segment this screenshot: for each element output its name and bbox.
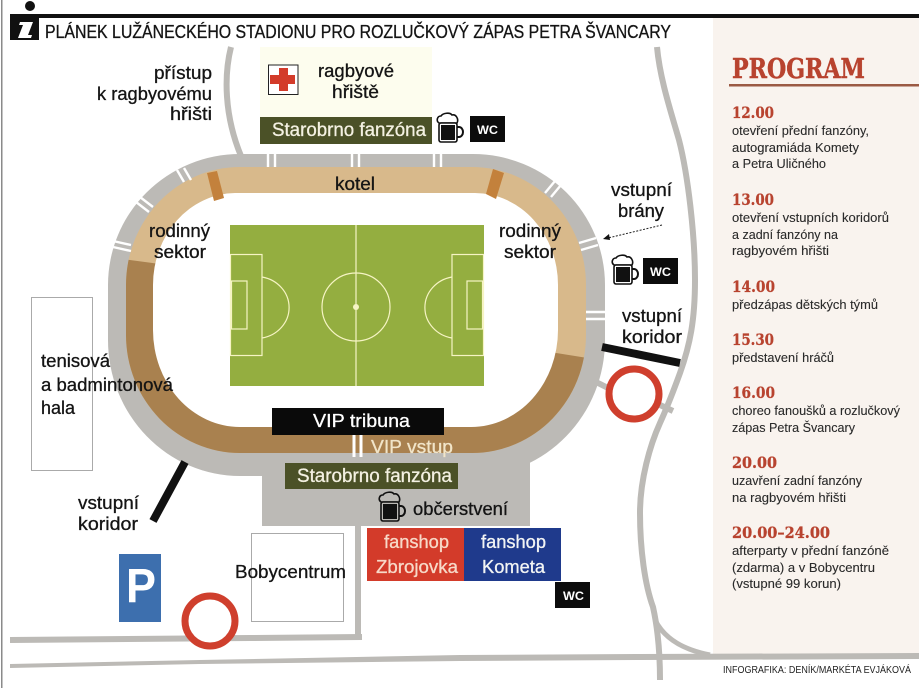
label: family sector right: sektor [504,242,556,262]
gate stripes [113,154,605,457]
label: refreshments: občerstvení [413,499,508,519]
icon: beer top [437,113,463,142]
panel: program [729,54,919,591]
item 16.00: choreo fanoušků a rozlučkový [732,403,900,418]
fanshop Kometa: Kometa [482,557,546,577]
red circle right [609,369,659,419]
rugby pitch area: hřiště [332,82,379,102]
icon: parking: P [126,560,156,613]
arrow: to gates [603,225,662,240]
item 15.30: 15.30 [732,330,774,349]
wc lower: WC [563,589,584,603]
item 13.00: ragbyovém hřišti [732,243,829,258]
title: PLÁNEK LUŽÁNECKÉHO STADIONU PRO ROZLUČKOVÝ ZÁPAS PETRA ŠVANCARY [45,21,671,42]
lower fan zone: Starobrno fanzóna [297,466,452,487]
wc right [643,258,678,284]
label: tennis hall [41,351,174,418]
VIP tribune [272,408,444,435]
item 14.00 [732,277,878,312]
item 20.00: 20.00 [732,453,777,472]
label: entry corridor right: vstupní [622,306,682,326]
concourse [262,455,530,526]
item 12.00 [732,103,869,171]
item 13.00: a zadní fanzóny na [732,227,839,242]
item 14.00: předzápas dětských týmů [732,297,878,312]
icon: beer right [612,255,638,284]
label: entry gates: brány [618,201,664,221]
item 15.30 [732,330,834,365]
item 16.00: 16.00 [732,383,775,402]
label: family sector right: rodinný [499,221,561,241]
label: family sector left: sektor [154,242,206,262]
item 12.00: a Petra Uličného [732,156,826,171]
label: tennis hall: hala [41,398,76,418]
icon: beer lower [379,492,405,521]
label: entry gates [611,180,672,221]
item 12.00: autogramiáda Komety [732,140,859,155]
fanshop Zbrojovka [367,528,464,581]
icon: red cross [268,65,298,94]
label: entry corridor left: koridor [78,514,138,534]
item 20.00–24.00: 20.00–24.00 [732,523,830,542]
stand ring: light [126,167,586,453]
program panel background [713,18,919,654]
item 20.00: na ragbyovém hřišti [732,490,846,505]
label: entry corridor left [78,493,139,534]
wc right: WC [650,265,671,279]
kotel dividers [207,171,224,201]
item 13.00: otevření vstupních koridorů [732,210,889,225]
rugby pitch area: ragbyové [318,61,394,81]
item 15.30: představení hráčů [732,350,834,365]
Bobycentrum [235,534,346,622]
program heading: PROGRAM [732,54,865,85]
wc top [470,116,505,142]
title bar [10,14,919,18]
fanshop Kometa: fanshop [481,532,546,552]
label: family sector left: rodinný [149,221,210,241]
label: entry gates: vstupní [611,180,672,200]
label: kotel: kotel [335,174,375,194]
wc top: WC [477,123,498,137]
stadium [108,154,605,526]
item 20.00 [732,453,862,505]
item 12.00: 12.00 [732,103,774,122]
icon: info i [10,1,39,40]
item 20.00–24.00 [732,523,889,591]
Bobycentrum: Bobycentrum [235,562,346,582]
football pitch [230,225,484,386]
label: family sector right [499,221,561,262]
label: access to rugby pitch: hřišti [170,104,212,124]
item 16.00: zápas Petra Švancary [732,420,855,435]
fanshop Kometa [464,528,561,581]
label: access to rugby pitch [97,63,212,124]
item 20.00: uzavření zadní fanzóny [732,473,862,488]
label: entry corridor right: koridor [622,327,682,347]
tennis hall building [32,298,92,470]
label: family sector left [149,221,210,262]
item 20.00–24.00: (vstupné 99 korun) [732,576,841,591]
upper fan zone: Starobrno fanzóna [272,120,426,141]
item 14.00: 14.00 [732,277,775,296]
VIP tribune: VIP tribuna [313,411,411,431]
item 20.00–24.00: afterparty v přední fanzóně [732,543,889,558]
label: entry corridor right [622,306,682,347]
corridor bar right [602,347,680,363]
label: access to rugby pitch: přístup [154,63,212,83]
red circle left [185,596,235,646]
label: access to rugby pitch: k ragbyovému [97,84,212,104]
item 12.00: otevření přední fanzóny, [732,123,869,138]
VIP entrance: VIP vstup [371,437,453,457]
icon: parking [119,554,161,622]
item 13.00: 13.00 [732,190,774,209]
item 20.00–24.00: (zdarma) a v Bobycentru [732,560,875,575]
roads [10,47,710,680]
rugby pitch area [260,47,432,117]
fanshop Zbrojovka: fanshop [384,532,449,552]
stand inner [153,193,558,427]
item 13.00 [732,190,889,258]
label: entry corridor left: vstupní [78,493,139,513]
label: tennis hall: a badmintonová [41,375,174,395]
corridor bar left [153,462,185,521]
fanshop Zbrojovka: Zbrojovka [376,557,459,577]
stand ring: dark [126,260,584,453]
label: tennis hall: tenisová [41,351,111,371]
wc lower [555,582,590,608]
item 16.00 [732,383,900,435]
